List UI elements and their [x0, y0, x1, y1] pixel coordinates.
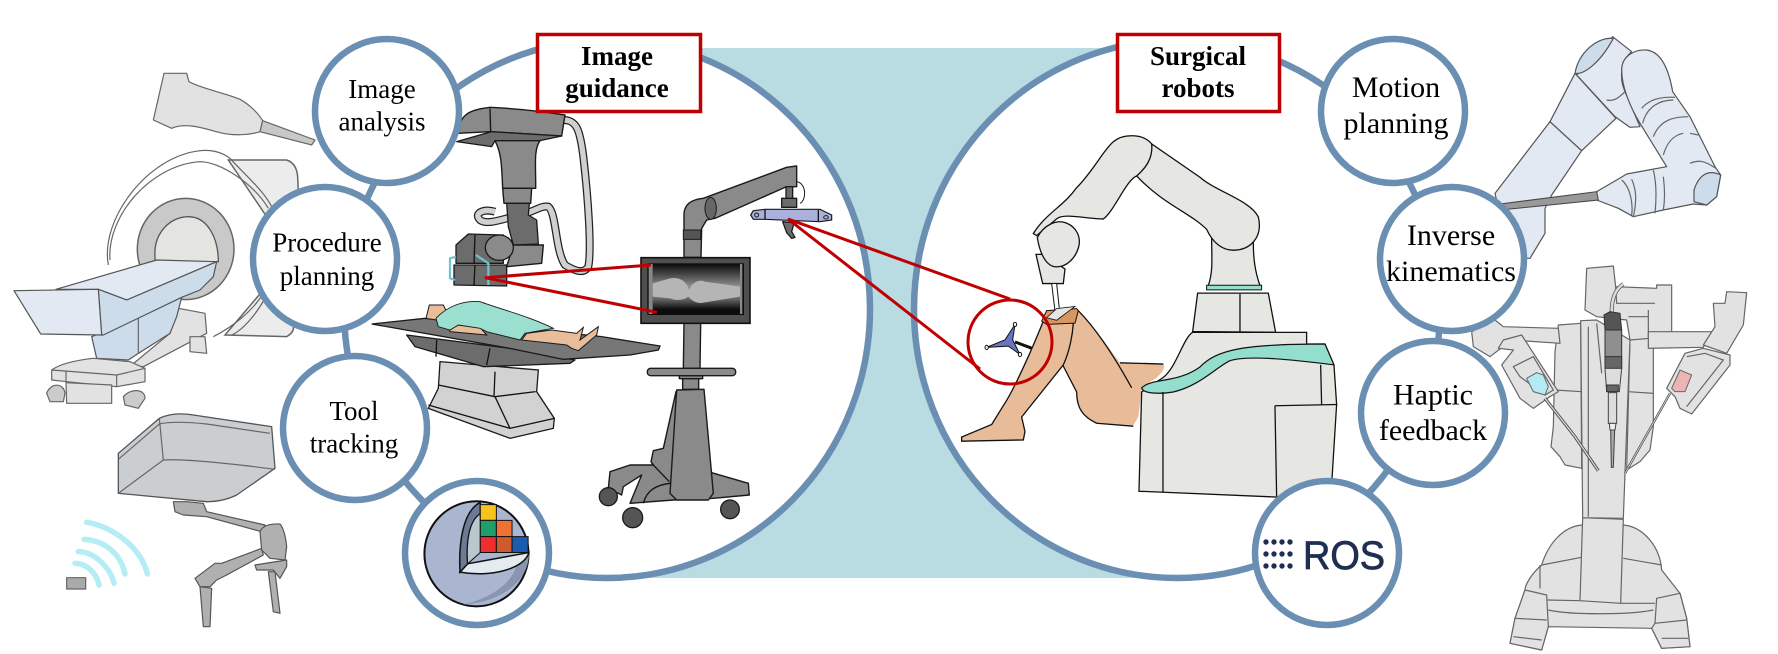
node: procedure planning: [253, 187, 397, 331]
heading: surgical robots: [1118, 34, 1280, 112]
node: motion planning: planning: [1344, 107, 1448, 140]
node: inverse kinematics: Inverse: [1407, 219, 1495, 252]
node: image analysis: [315, 39, 459, 183]
icon: patient on table: [372, 301, 660, 438]
callout: zoom circle on leg marker: [968, 300, 1052, 384]
icon: tracking cart with monitor: [599, 166, 832, 528]
heading: surgical robots: robots: [1161, 73, 1235, 103]
node: procedure planning: Procedure: [272, 228, 382, 258]
icon: tracked marker inside zoom circle: [985, 322, 1032, 357]
icon: collaborative robot arm, blue: [1495, 37, 1721, 258]
heading: image guidance: [538, 34, 700, 112]
panel: image guidance circle: [344, 40, 870, 578]
heading: image guidance: Image: [581, 41, 653, 71]
node: inverse kinematics: [1380, 187, 1524, 331]
node: tool tracking: tracking: [310, 428, 398, 458]
node: motion planning: [1321, 39, 1465, 183]
red link: C-arm to monitor: [485, 265, 657, 312]
node: tool tracking: [283, 356, 427, 500]
icon: robot base cart: [1139, 332, 1337, 497]
icon: C-arm fluoroscope: [450, 107, 590, 286]
icon: optical tracking camera: [118, 414, 287, 627]
node: 3D Slicer logo: [405, 481, 549, 625]
node: haptic feedback: feedback: [1379, 414, 1487, 447]
node: image analysis: Image: [348, 74, 416, 104]
node: tool tracking: Tool: [329, 396, 379, 426]
icon: surgical robot arm: [1033, 136, 1276, 332]
node: procedure planning: planning: [280, 261, 374, 291]
red link: tracker to zoom circle: [788, 219, 1010, 369]
node: haptic feedback: [1361, 341, 1505, 485]
icon: patient leg: [962, 306, 1164, 441]
node: motion planning: Motion: [1352, 71, 1440, 104]
node: inverse kinematics: kinematics: [1386, 255, 1516, 288]
icon: MRI scanner: [14, 150, 298, 408]
node: image analysis: analysis: [338, 106, 426, 136]
node: haptic feedback: Haptic: [1393, 378, 1473, 412]
connecting band: [640, 48, 1150, 578]
icon: multi-arm surgical robot: [1472, 266, 1747, 650]
icon: ultrasound probe: [153, 73, 315, 145]
node: ROS logo: ROS: [1303, 534, 1385, 578]
heading: surgical robots: Surgical: [1150, 41, 1246, 71]
node: ROS logo: [1255, 481, 1399, 625]
heading: image guidance: guidance: [565, 73, 669, 103]
panel: surgical robots circle: [914, 40, 1440, 578]
icon: wireless signal: [67, 522, 147, 589]
